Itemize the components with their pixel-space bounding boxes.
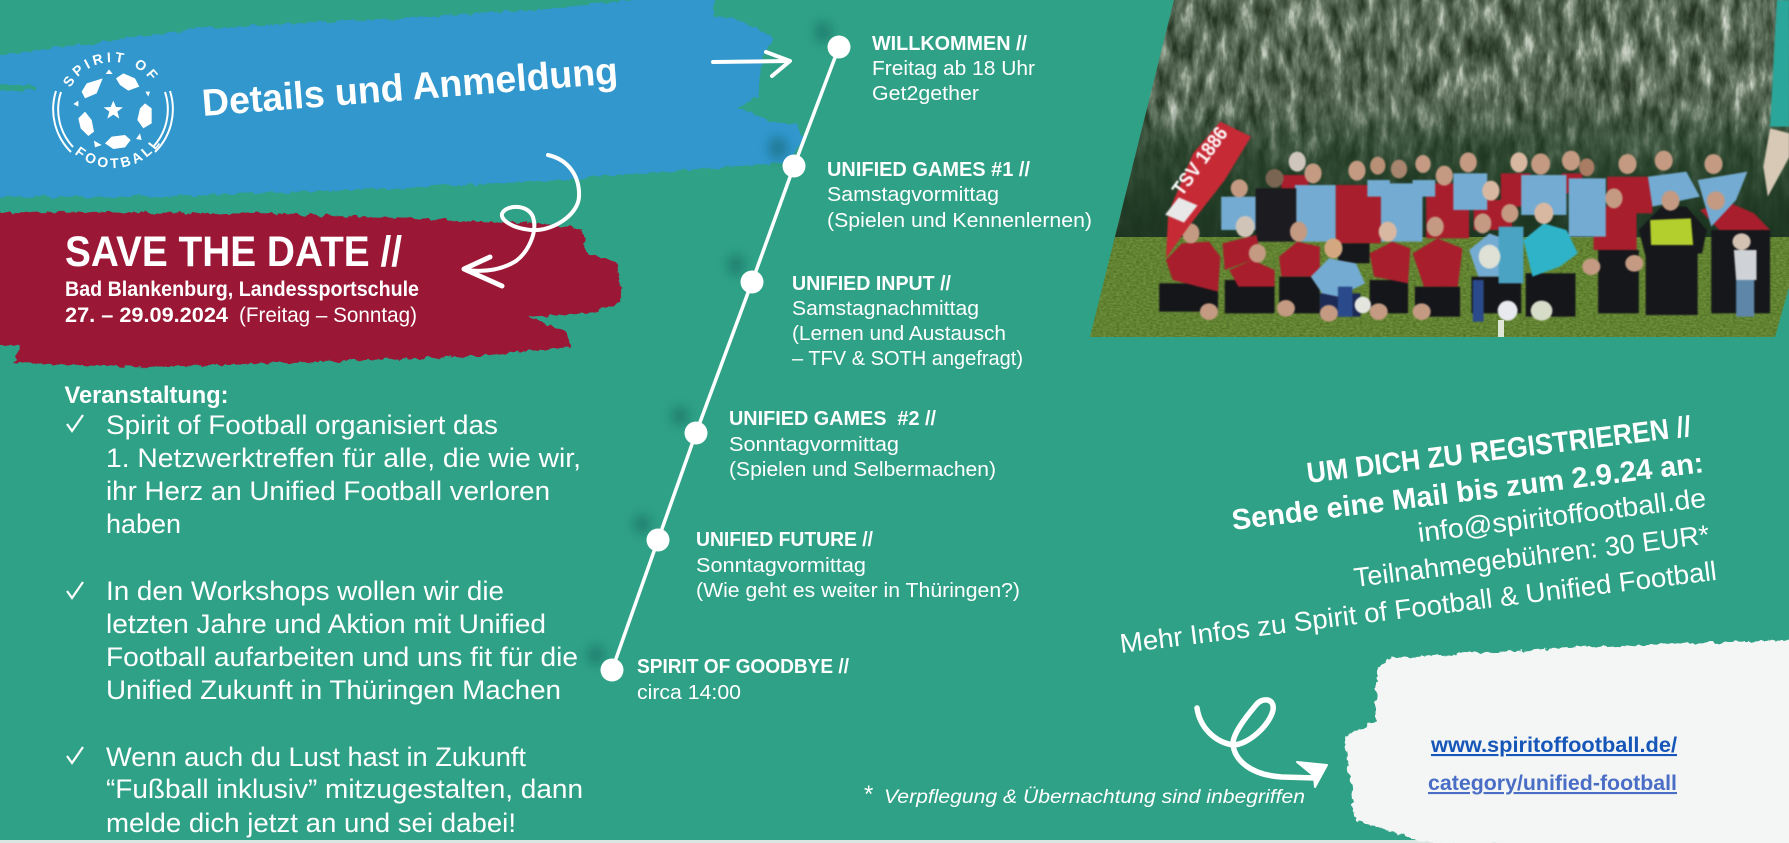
timeline item: Willkommen: Get2gether [872,83,979,105]
footnote [864,781,1305,808]
timeline item: Unified Games #1: Samstagvormittag [827,184,999,206]
registration text block: Teilnahmegebühren: 30 EUR* [1352,519,1712,593]
photo: team group picture [1080,0,1789,340]
maroon brush banner [0,212,622,367]
link lines: www.spiritoffootball.de/ [1430,734,1677,757]
footnote: * [864,781,873,808]
curly arrow: to save the date [464,155,579,286]
timeline item: Unified Games #1 [827,159,1092,232]
timeline item: Unified Games #2: Sonntagvormittag [729,434,899,456]
event description list: Spirit of Football organisiert das [106,410,498,440]
timeline item: Unified Future: Sonntagvormittag [696,555,866,577]
photo detail: back row of players [1221,151,1770,317]
heading: Details und Anmeldung: Details und Anmeldung [200,50,619,125]
link lines: category/unified-football [1428,772,1677,795]
timeline item: Spirit of Goodbye: SPIRIT OF GOODBYE // [637,656,849,678]
registration text block: info@spiritoffootball.de [1416,483,1708,548]
event description list: letzten Jahre und Aktion mit Unified [106,609,546,639]
save the date text block: (Freitag – Sonntag) [239,304,417,327]
registration text block: UM DICH ZU REGISTRIEREN // [1305,411,1693,490]
registration text block [1118,411,1718,659]
timeline item: Unified Input: Samstagnachmittag [792,298,979,320]
timeline item: Unified Input [792,273,1023,370]
timeline item: Unified Games #1: UNIFIED GAMES #1 // [827,159,1030,181]
timeline item: Unified Input: – TFV & SOTH angefragt) [792,348,1023,370]
timeline item: Unified Games #2: UNIFIED GAMES #2 // [729,408,936,430]
link lines [1428,734,1677,795]
timeline item: Spirit of Goodbye [637,656,849,704]
photo detail: teal flag [1763,0,1789,197]
event description list: haben [106,509,181,539]
save the date text block: 27. – 29.09.2024 [65,304,228,327]
photo detail: banner lettering: TSV 1886 [1168,123,1232,200]
registration text block: Mehr Infos zu Spirit of Football & Unified Football [1118,556,1718,659]
timeline item: Unified Future: (Wie geht es weiter in Thüringen?) [696,580,1020,602]
photo detail: front row of players [1159,203,1643,322]
timeline item: Unified Input: (Lernen und Austausch [792,323,1006,345]
event description list: melde dich jetzt an und sei dabei! [106,808,516,838]
timeline item: Unified Input: UNIFIED INPUT // [792,273,951,295]
white brush panel [1345,640,1789,843]
timeline item: Spirit of Goodbye: circa 14:00 [637,682,741,704]
timeline item: Unified Future [696,529,1020,602]
timeline item: Unified Games #1: (Spielen und Kennenlernen) [827,210,1092,232]
event description list: Veranstaltung: [64,382,228,409]
timeline item: Willkommen: WILLKOMMEN // [872,33,1027,55]
arrow: to timeline [713,52,790,76]
timeline item: Unified Future: UNIFIED FUTURE // [696,529,873,551]
event description list: 1. Netzwerktreffen für alle, die wie wir, [106,443,581,473]
bottom edge strip [0,840,1789,843]
photo detail: red TSV banner [1165,122,1251,258]
save the date text block [65,228,419,327]
save the date text block: Bad Blankenburg, Landessportschule [65,278,419,301]
timeline item: Unified Games #2 [729,408,996,481]
timeline item: Willkommen: Freitag ab 18 Uhr [872,58,1035,80]
registration text block: Sende eine Mail bis zum 2.9.24 an: [1230,447,1705,537]
timeline [587,21,850,682]
event description list: Wenn auch du Lust hast in Zukunft [106,742,526,772]
logo: Spirit of Football: SPIRIT OF [64,52,158,86]
save the date text block: SAVE THE DATE // [65,228,402,276]
logo: Spirit of Football [52,52,174,168]
event description list: In den Workshops wollen wir die [106,576,504,606]
timeline item: Willkommen [872,33,1035,105]
timeline item: Unified Games #2: (Spielen und Selbermachen) [729,459,996,481]
event description list: “Fußball inklusiv” mitzugestalten, dann [106,774,583,804]
event description list: ihr Herz an Unified Football verloren [106,476,550,506]
curly arrow: to links [1197,700,1327,787]
logo: Spirit of Football: FOOTBALL [75,142,160,168]
footnote: Verpflegung & Übernachtung sind inbegriffen [884,787,1305,808]
event description list: Football aufarbeiten und uns fit für die [106,642,578,672]
event description list: Unified Zukunft in Thüringen Machen [106,675,561,705]
event description list [64,382,583,838]
blue brush banner [0,0,803,197]
